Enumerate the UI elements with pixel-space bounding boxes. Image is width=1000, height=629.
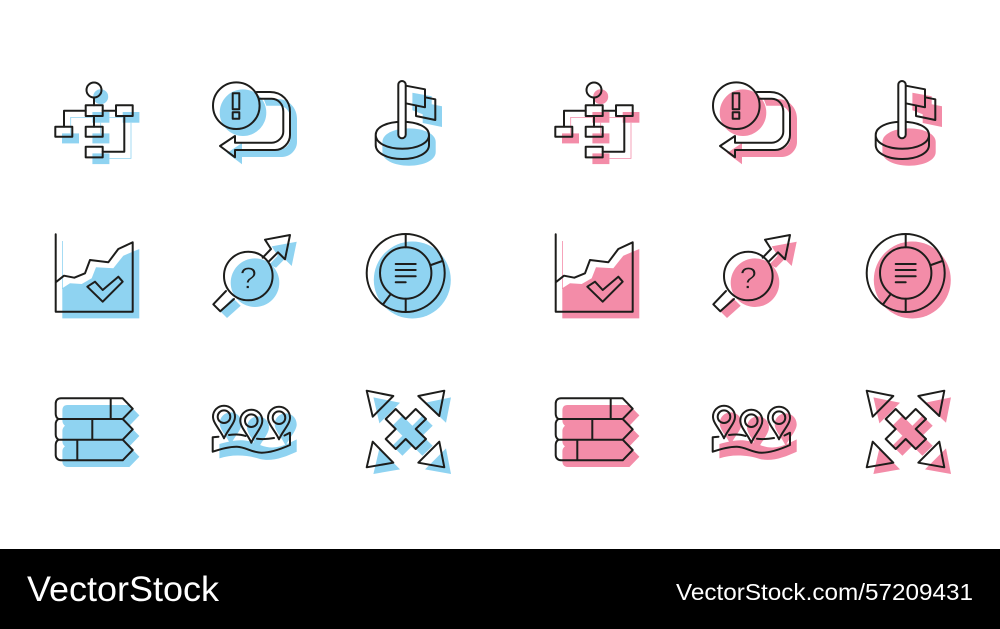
icon: flag on base — [376, 81, 442, 166]
icon: flowchart — [55, 82, 139, 164]
icon set: pink — [555, 81, 951, 474]
icon: alert with return arrow pink — [713, 82, 797, 164]
footer image url: VectorStock.com/57209431 — [676, 579, 973, 605]
icon: magnifier with question and arrow pink — [713, 235, 797, 318]
icon: map pins pink — [713, 406, 797, 460]
icon: alert with return arrow — [213, 82, 297, 164]
icon: cross with four arrows pink — [867, 391, 951, 474]
icon: area chart with check — [56, 234, 139, 318]
icon: donut report pink — [867, 234, 951, 318]
icon: magnifier with question and arrow pink: ? — [740, 260, 757, 295]
icon: magnifier with question and arrow — [213, 235, 297, 318]
icon: arrow bars pink — [556, 398, 639, 467]
icon: area chart with check pink — [556, 234, 639, 318]
icon: arrow bars — [56, 398, 139, 467]
icon: donut report — [367, 234, 451, 318]
icon: flowchart pink — [555, 82, 639, 164]
footer bar — [0, 549, 1000, 629]
footer logo text: VectorStock — [27, 569, 219, 609]
icon: magnifier with question and arrow: ? — [240, 260, 257, 295]
icon: cross with four arrows — [367, 391, 451, 474]
icon: flag on base pink — [876, 81, 942, 166]
icon: map pins — [213, 406, 297, 460]
icon set: blue — [55, 81, 451, 474]
